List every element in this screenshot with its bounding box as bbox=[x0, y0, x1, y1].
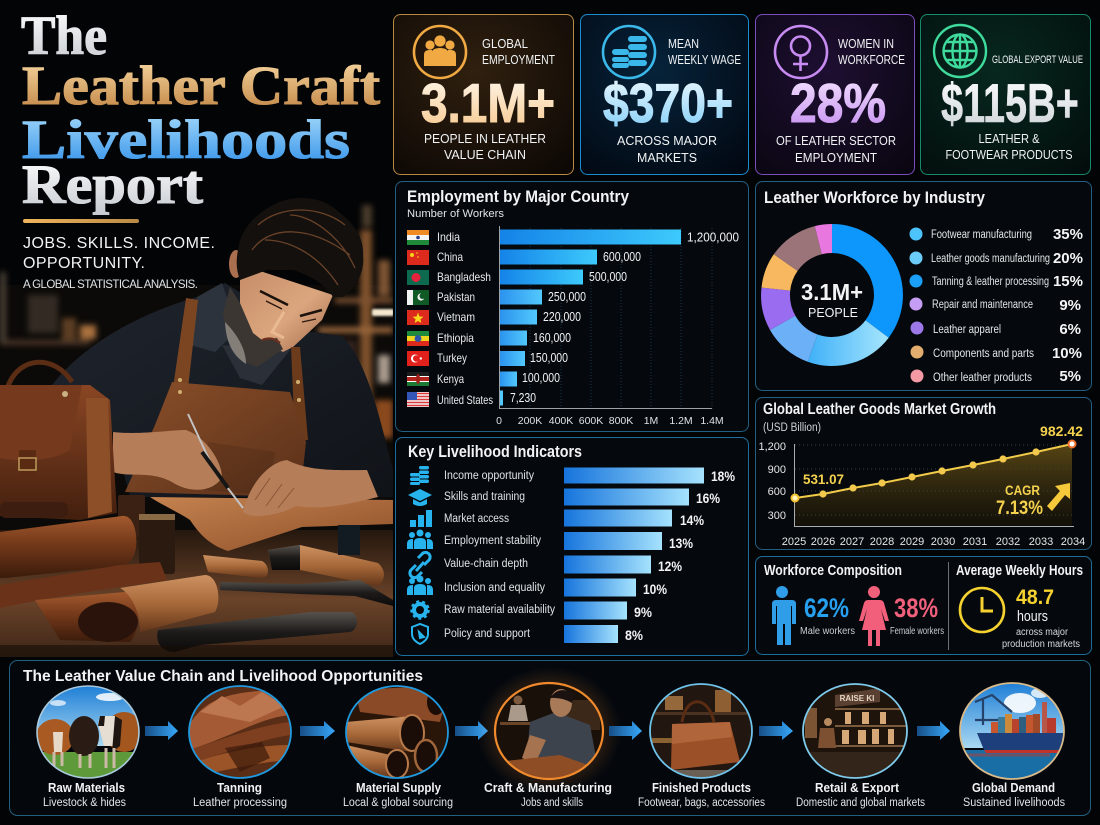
chart grid and axis: 1.4M bbox=[700, 415, 724, 427]
KPI card: global employment: VALUE CHAIN bbox=[444, 147, 526, 162]
leather bag bbox=[0, 362, 117, 520]
chart grid and axis: 0 bbox=[496, 415, 502, 427]
tagline bbox=[23, 235, 215, 291]
heading: Key Livelihood Indicators bbox=[408, 443, 582, 461]
tagline: JOBS. SKILLS. INCOME. bbox=[23, 235, 215, 252]
bar values: 600,000 bbox=[603, 249, 641, 264]
heading: Leather Workforce by Industry bbox=[764, 188, 985, 207]
KPI card: mean weekly wage bbox=[580, 14, 748, 174]
indicator values bbox=[625, 468, 735, 643]
male share bbox=[800, 593, 855, 637]
chart grid and axis: 600K bbox=[579, 415, 603, 427]
panel: employment by major country bbox=[396, 182, 748, 432]
CAGR callout: CAGR bbox=[1005, 483, 1040, 498]
step: tanning bbox=[189, 686, 291, 778]
step: raw materials bbox=[36, 686, 143, 780]
legend: Other leather products bbox=[933, 372, 1032, 384]
bar values: 160,000 bbox=[533, 330, 571, 345]
icon: globe bbox=[934, 25, 986, 77]
KPI card: global employment bbox=[394, 14, 574, 174]
panel: leather value chain bbox=[10, 660, 1090, 816]
female share: Female workers bbox=[890, 626, 944, 637]
step labels: Jobs and skills bbox=[521, 797, 583, 809]
weekly hours value: hours bbox=[1017, 609, 1048, 625]
line chart bbox=[758, 423, 1085, 548]
legend: 9% bbox=[1059, 297, 1081, 314]
indicator values: 18% bbox=[711, 468, 735, 484]
female share bbox=[890, 593, 944, 637]
donut centre total: 3.1M+ bbox=[801, 279, 863, 305]
chart grid and axis: 200K bbox=[518, 415, 542, 427]
female share: 38% bbox=[894, 593, 938, 623]
indicator values: 8% bbox=[625, 627, 643, 643]
line chart: 300 bbox=[768, 510, 786, 522]
line chart: 2028 bbox=[870, 536, 894, 548]
bar values: 500,000 bbox=[589, 269, 627, 284]
leather sheet bbox=[150, 497, 393, 551]
step labels: Leather processing bbox=[193, 797, 287, 809]
arrow: tanning to material supply bbox=[300, 721, 335, 740]
country labels: Ethiopia bbox=[437, 331, 474, 345]
title bbox=[21, 5, 381, 215]
donut chart bbox=[761, 224, 903, 366]
step: material supply bbox=[346, 686, 448, 778]
step labels: Local & global sourcing bbox=[343, 797, 453, 809]
indicator labels: Value-chain depth bbox=[444, 558, 528, 570]
title: The bbox=[21, 5, 107, 66]
line chart: 2027 bbox=[840, 536, 864, 548]
step labels: Material Supply bbox=[356, 780, 442, 795]
KPI card: global export value: FOOTWEAR PRODUCTS bbox=[946, 147, 1073, 162]
bar values: 220,000 bbox=[543, 309, 581, 324]
weekly hours value bbox=[1002, 586, 1080, 650]
indicator labels: Employment stability bbox=[444, 535, 541, 547]
bars bbox=[500, 230, 681, 406]
step: global demand bbox=[960, 683, 1066, 780]
work table bbox=[0, 530, 393, 657]
indicator labels: Inclusion and equality bbox=[444, 582, 545, 594]
CAGR callout bbox=[996, 483, 1070, 519]
icon: coin stacks bbox=[603, 26, 655, 78]
line chart: 2031 bbox=[963, 536, 987, 548]
country labels bbox=[437, 230, 493, 407]
leather rolls, spools and tools bbox=[0, 495, 393, 652]
KPI card: mean weekly wage: ACROSS MAJOR bbox=[617, 133, 717, 148]
panel: key livelihood indicators bbox=[396, 438, 748, 656]
country labels: United States bbox=[437, 393, 493, 407]
step labels: Sustained livelihoods bbox=[963, 797, 1065, 809]
KPI card: global employment: GLOBAL bbox=[482, 37, 528, 51]
leather apron bbox=[125, 298, 308, 497]
indicator values: 14% bbox=[680, 512, 704, 528]
step: retail and export bbox=[803, 684, 907, 778]
arms and hands bbox=[113, 430, 222, 490]
step labels: Footwear, bags, accessories bbox=[638, 797, 765, 809]
KPI card: global employment: PEOPLE IN LEATHER bbox=[424, 131, 546, 146]
bar values: 7,230 bbox=[510, 390, 536, 405]
indicator labels: Policy and support bbox=[444, 628, 531, 640]
legend: 10% bbox=[1052, 345, 1082, 362]
step labels: Raw Materials bbox=[48, 780, 125, 795]
hero illustration: leather craftsman at workbench bbox=[0, 198, 394, 660]
panel: workforce composition and average weekly hours bbox=[756, 556, 1092, 654]
line chart: 2025 bbox=[782, 536, 806, 548]
arrow: craft to finished products bbox=[609, 721, 642, 740]
KPI card: mean weekly wage: MARKETS bbox=[637, 150, 697, 165]
male share: 62% bbox=[804, 593, 849, 623]
KPI card: global employment: 3.1M+ bbox=[421, 72, 555, 134]
bar values: 1,200,000 bbox=[687, 230, 739, 244]
legend bbox=[910, 226, 1083, 385]
KPI card: women in workforce: WOMEN IN bbox=[838, 37, 894, 51]
step labels: Tanning bbox=[217, 780, 262, 795]
legend: Repair and maintenance bbox=[932, 299, 1033, 311]
title underline bbox=[23, 219, 139, 223]
country labels: India bbox=[437, 230, 460, 244]
icon: people group bbox=[414, 26, 466, 78]
chart grid and axis: 400K bbox=[549, 415, 573, 427]
arrow: material supply to craft bbox=[455, 721, 488, 740]
indicator labels: Skills and training bbox=[444, 491, 525, 503]
indicator values: 10% bbox=[643, 581, 667, 597]
start value callout: 531.07 bbox=[803, 471, 844, 487]
indicator values: 13% bbox=[669, 535, 693, 551]
line chart: 2026 bbox=[811, 536, 835, 548]
heading: The Leather Value Chain and Livelihood Opportunities bbox=[23, 668, 423, 685]
CAGR callout: 7.13% bbox=[996, 498, 1043, 519]
line chart: 900 bbox=[768, 464, 786, 476]
arrow: raw materials to tanning bbox=[145, 721, 178, 740]
country labels: Vietnam bbox=[437, 310, 475, 324]
country labels: China bbox=[437, 250, 463, 264]
tagline: A GLOBAL STATISTICAL ANALYSIS. bbox=[23, 279, 198, 291]
country labels: Bangladesh bbox=[437, 270, 491, 284]
bar values bbox=[510, 230, 739, 405]
country labels: Turkey bbox=[437, 351, 467, 365]
legend: 20% bbox=[1053, 250, 1083, 267]
chart grid and axis: 1M bbox=[644, 415, 658, 427]
KPI card: global employment: EMPLOYMENT bbox=[482, 53, 555, 67]
line chart: 2033 bbox=[1029, 536, 1053, 548]
weekly hours value: production markets bbox=[1002, 639, 1080, 650]
heading: Global Leather Goods Market Growth bbox=[763, 401, 996, 418]
arrow: growth bbox=[1047, 483, 1070, 511]
KPI card: women in workforce: OF LEATHER SECTOR bbox=[776, 133, 896, 148]
bar values: 150,000 bbox=[530, 350, 568, 365]
indicator labels: Market access bbox=[444, 513, 509, 525]
bar values: 250,000 bbox=[548, 289, 586, 304]
chart grid and axis: 800K bbox=[609, 415, 633, 427]
panel: global leather goods market growth bbox=[756, 398, 1092, 550]
KPI card: mean weekly wage: WEEKLY WAGE bbox=[668, 53, 741, 67]
legend: Leather goods manufacturing bbox=[931, 253, 1050, 265]
line chart: 600 bbox=[768, 486, 786, 498]
step: retail and export: RAISE KI bbox=[840, 694, 874, 703]
step labels: Livestock & hides bbox=[43, 797, 126, 809]
step labels bbox=[43, 780, 1065, 809]
legend: Components and parts bbox=[933, 348, 1034, 360]
subheading: Number of Workers bbox=[407, 208, 505, 220]
icon: male worker bbox=[772, 586, 796, 645]
heading: Employment by Major Country bbox=[407, 188, 630, 206]
icon: female symbol bbox=[775, 26, 827, 78]
indicator bars bbox=[564, 468, 704, 643]
unit label: (USD Billion) bbox=[763, 422, 821, 434]
flags bbox=[407, 230, 429, 407]
workshop background bbox=[0, 205, 394, 550]
country labels: Kenya bbox=[437, 372, 464, 386]
step labels: Finished Products bbox=[652, 780, 751, 795]
KPI card: women in workforce bbox=[756, 14, 914, 174]
arrow: retail to global demand bbox=[917, 721, 950, 740]
male share: Male workers bbox=[800, 626, 855, 637]
weekly hours value: across major bbox=[1016, 627, 1069, 638]
chart grid and axis bbox=[496, 226, 724, 427]
line chart: 2030 bbox=[931, 536, 955, 548]
indicator values: 12% bbox=[658, 558, 682, 574]
KPI card: global export value bbox=[920, 14, 1090, 174]
line chart: 2032 bbox=[996, 536, 1020, 548]
KPI card: women in workforce: WORKFORCE bbox=[838, 53, 905, 67]
KPI card: mean weekly wage: MEAN bbox=[668, 37, 699, 51]
step: craft and manufacturing bbox=[482, 671, 616, 791]
end value callout: 982.42 bbox=[1040, 423, 1083, 439]
country labels: Pakistan bbox=[437, 290, 475, 304]
donut chart: PEOPLE bbox=[808, 306, 858, 320]
icon: clock bbox=[960, 588, 1004, 632]
step: finished products bbox=[650, 684, 752, 779]
indicator values: 16% bbox=[696, 490, 720, 506]
chart grid and axis: 1.2M bbox=[669, 415, 693, 427]
KPI card: women in workforce: 28% bbox=[790, 72, 886, 134]
bar values: 100,000 bbox=[522, 370, 560, 385]
table bottom shading bbox=[0, 645, 393, 657]
legend: 6% bbox=[1059, 321, 1081, 338]
step labels: Retail & Export bbox=[815, 780, 900, 795]
line chart: 2034 bbox=[1061, 536, 1085, 548]
line chart: 2029 bbox=[900, 536, 924, 548]
legend: 5% bbox=[1059, 368, 1081, 385]
title: Leather Craft bbox=[22, 55, 381, 116]
tagline: OPPORTUNITY. bbox=[23, 255, 145, 272]
line chart: 1,200 bbox=[758, 441, 786, 453]
panel: leather workforce by industry bbox=[756, 182, 1092, 390]
divider bbox=[948, 562, 950, 650]
KPI card: global export value: LEATHER & bbox=[978, 131, 1040, 146]
legend: Tanning & leather processing bbox=[932, 276, 1049, 288]
legend: Footwear manufacturing bbox=[931, 229, 1032, 241]
title: Report bbox=[22, 154, 204, 215]
legend: Leather apparel bbox=[933, 324, 1001, 336]
indicator labels bbox=[444, 470, 555, 640]
KPI card: mean weekly wage: $370+ bbox=[603, 72, 733, 134]
indicator values: 9% bbox=[634, 604, 652, 620]
heading: workforce composition: Workforce Composition bbox=[764, 563, 902, 579]
step labels: Global Demand bbox=[972, 780, 1055, 795]
craftsman bbox=[52, 198, 393, 516]
icon: female worker bbox=[859, 586, 889, 646]
legend: 15% bbox=[1053, 273, 1083, 290]
legend: 35% bbox=[1053, 226, 1083, 243]
KPI card: women in workforce: EMPLOYMENT bbox=[795, 150, 877, 165]
weekly hours value: 48.7 bbox=[1016, 586, 1054, 609]
indicator labels: Raw material availability bbox=[444, 604, 555, 616]
title: Livelihoods bbox=[22, 109, 350, 170]
step labels: Domestic and global markets bbox=[796, 797, 925, 809]
indicator labels: Income opportunity bbox=[444, 470, 534, 482]
indicator icons bbox=[407, 466, 433, 644]
step labels: Craft & Manufacturing bbox=[484, 780, 612, 795]
arrow: finished products to retail bbox=[759, 721, 793, 740]
